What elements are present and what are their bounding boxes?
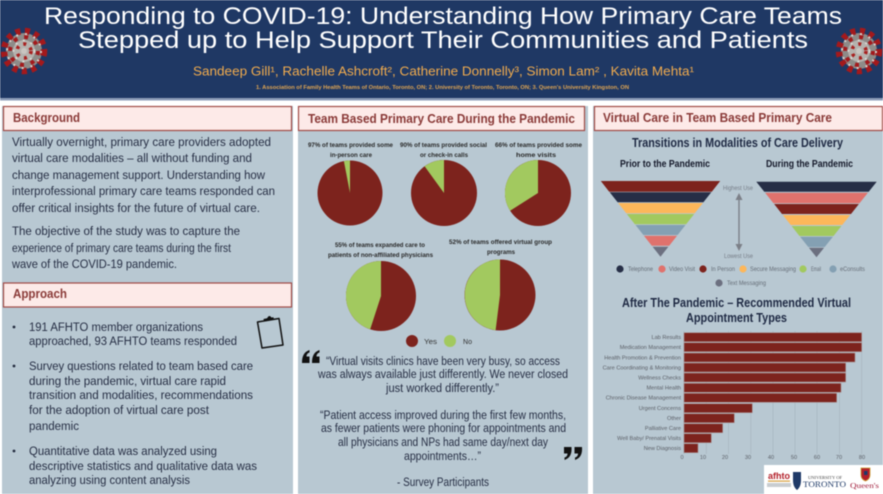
icon: opening quotation mark <box>302 350 320 363</box>
bar chart: recommended virtual appointment types: Other <box>667 416 681 422</box>
title: Responding to COVID-19: Understanding How Primary Care Teams <box>44 3 842 30</box>
text block: background: experience of primary care teams during the first <box>12 241 232 255</box>
heading: Team Based Primary Care: Team Based Primary Care During the Pandemic <box>308 111 575 126</box>
text block: quotes: just worked differently.” <box>385 381 499 395</box>
text block: approach bullets: approached, 93 AFHTO teams responded <box>29 334 237 348</box>
bar chart: recommended virtual appointment types: Mental Health <box>646 386 681 392</box>
text block: approach bullets: Quantitative data was analyzed using <box>29 444 217 458</box>
panel: right column <box>593 106 883 494</box>
legend: modalities: In Person <box>711 267 735 273</box>
bar chart: recommended virtual appointment types: 10 <box>700 455 706 461</box>
pie: non-affiliated physicians: 55% of teams expanded care to <box>335 242 425 249</box>
legend: modalities: Email <box>811 267 821 273</box>
authors: Sandeep Gill¹, Rachelle Ashcroft², Catherine Donnelly³, Simon Lam² , Kavita Mehta¹ <box>193 64 695 78</box>
text block: quotes <box>317 354 568 489</box>
text block: quotes: was always available just differently. We never closed <box>317 367 568 381</box>
bar chart: recommended virtual appointment types: 20 <box>722 455 728 461</box>
text block: background <box>11 135 275 271</box>
affiliations: 1. Association of Family Health Teams of Ontario, Toronto, ON; 2. University of Toronto, Toronto, ON; 3. Queen's University Kingston, ON <box>256 85 629 91</box>
text block: quotes: “Patient access improved during the first few months, <box>320 408 566 422</box>
pie: home visits <box>495 142 582 226</box>
bar chart: recommended virtual appointment types: 50 <box>791 455 797 461</box>
logos <box>764 465 883 494</box>
bar chart: recommended virtual appointment types: Well Baby/ Prenatal Visits <box>617 436 681 442</box>
heading: Virtual Care <box>594 106 882 130</box>
arrow: highest to lowest use: Highest Use <box>723 186 754 192</box>
panel: middle column <box>298 106 588 494</box>
pie: in-person care: in-person care <box>330 152 372 159</box>
heading: Background: Background <box>13 110 80 125</box>
bar chart: recommended virtual appointment types: Health Promotion & Prevention <box>604 355 681 361</box>
pie: home visits: 66% of teams provided some <box>495 142 582 149</box>
icon: coronavirus right <box>839 31 879 71</box>
text block: quotes: - Survey Participants <box>397 475 489 489</box>
arrow: highest to lowest use <box>723 186 754 260</box>
bar chart: recommended virtual appointment types: 60 <box>814 455 820 461</box>
text block: background: The objective of the study was to capture the <box>12 224 240 238</box>
bar chart: recommended virtual appointment types: 30 <box>745 455 751 461</box>
pie: virtual group programs: 52% of teams offered virtual group <box>449 239 552 246</box>
heading: Approach: Approach <box>13 286 67 301</box>
text block: approach bullets: descriptive statistics and qualitative data was <box>29 459 257 473</box>
legend: modalities: Video Visit <box>669 267 695 273</box>
bar chart: recommended virtual appointment types: Wellness Checks <box>638 375 681 381</box>
legend: yes / no: No <box>463 339 472 346</box>
text block: approach bullets <box>13 320 257 487</box>
logo: Queen's: Queen's <box>850 481 879 490</box>
bar chart: recommended virtual appointment types: Urgent Concerns <box>639 406 681 412</box>
text block: approach bullets: during the pandemic, virtual care rapid <box>29 374 226 388</box>
panel: left column <box>2 106 293 494</box>
legend: modalities: Telephone <box>628 267 654 273</box>
text block: approach bullets: pandemic <box>29 419 79 433</box>
bar chart: recommended virtual appointment types: 80 <box>859 455 865 461</box>
bar chart: recommended virtual appointment types: New Diagnosis <box>644 446 681 452</box>
text block: quotes: all physicians and NPs had same day/next day <box>338 435 549 449</box>
title <box>44 3 842 54</box>
bar chart: recommended virtual appointment types: Care Coordinating & Monitoring <box>603 365 681 371</box>
text block: approach bullets: analyzing using content analysis <box>29 473 190 487</box>
pie: in-person care <box>308 142 393 226</box>
text block: quotes: as fewer patients were phoning for appointments and <box>321 421 566 435</box>
heading: Transitions: Transitions in Modalities of Care Delivery <box>632 136 843 150</box>
text block: background: virtual care modalities – all without funding and <box>12 151 252 165</box>
bar chart: recommended virtual appointment types: Lab Results <box>651 335 681 341</box>
text block: background: change management support. Understanding how <box>12 168 265 182</box>
title: Stepped up to Help Support Their Communities and Patients <box>78 27 808 54</box>
heading: Virtual Care: Virtual Care in Team Based Primary Care <box>603 110 832 125</box>
text block: approach bullets: Survey questions related to team based care <box>29 359 253 373</box>
text block: approach bullets: transition and modalities, recommendations <box>29 388 253 402</box>
pie: social calls: 90% of teams provided social <box>400 142 487 149</box>
text block: quotes: “Virtual visits clinics have been very busy, so access <box>326 354 560 368</box>
header banner <box>0 0 883 100</box>
heading: After the pandemic: After The Pandemic – Recommended Virtual <box>622 296 851 310</box>
legend: yes / no: Yes <box>424 339 438 346</box>
bar chart: recommended virtual appointment types: Medication Management <box>620 345 681 351</box>
pie: home visits: home visits <box>516 152 556 159</box>
pie: virtual group programs: programs <box>487 249 515 256</box>
legend: modalities <box>616 265 865 287</box>
logo: University of Toronto <box>793 472 846 490</box>
heading: prior: Prior to the Pandemic <box>620 158 710 170</box>
text block: background: offer critical insights for the future of virtual care. <box>12 201 260 215</box>
pie: social calls: or check-in calls <box>420 152 468 159</box>
bar chart: recommended virtual appointment types: Palliative Care <box>645 426 681 432</box>
icon: clipboard <box>258 316 283 348</box>
bar chart: recommended virtual appointment types: 40 <box>768 455 774 461</box>
icon: coronavirus left <box>4 31 44 71</box>
pie: virtual group programs <box>449 239 552 330</box>
logo: University of Toronto: UNIVERSITY OF <box>808 475 843 480</box>
text block: background: wave of the COVID-19 pandemic. <box>11 257 177 271</box>
heading: After the pandemic <box>622 296 851 325</box>
legend: modalities: Secure Messaging <box>750 267 796 273</box>
funnel: prior to the pandemic <box>601 181 720 257</box>
text block: approach bullets: for the adoption of virtual care post <box>29 403 210 417</box>
heading: Approach <box>4 283 292 307</box>
legend: modalities: eConsults <box>840 267 865 273</box>
text block: quotes: appointments…” <box>404 449 481 463</box>
bar chart: recommended virtual appointment types <box>603 331 865 461</box>
pie: non-affiliated physicians: patients of non-affiliated physicians <box>328 252 433 259</box>
heading: during: During the Pandemic <box>766 158 853 170</box>
bar chart: recommended virtual appointment types: 70 <box>836 455 842 461</box>
heading: Team Based Primary Care <box>298 106 584 130</box>
bar chart: recommended virtual appointment types: Chronic Disease Management <box>606 396 681 402</box>
heading: Background <box>4 106 292 130</box>
logo: University of Toronto: TORONTO <box>803 479 846 489</box>
heading: After the pandemic: Appointment Types <box>686 311 787 325</box>
pie: social calls <box>400 142 487 226</box>
icon: closing quotation mark <box>564 447 582 460</box>
text block: background: interprofessional primary care teams responded can <box>12 184 275 198</box>
legend: yes / no <box>406 335 472 347</box>
logo: afhto: afhto <box>768 471 790 481</box>
pie: non-affiliated physicians <box>328 242 433 331</box>
legend: modalities: Text Messaging <box>727 281 766 287</box>
text block: approach bullets: 191 AFHTO member organizations <box>29 320 203 334</box>
funnel: during the pandemic <box>756 182 877 257</box>
text block: background: Virtually overnight, primary care providers adopted <box>12 135 271 149</box>
pie: in-person care: 97% of teams provided some <box>308 142 393 149</box>
bar chart: recommended virtual appointment types: 0 <box>680 455 684 461</box>
arrow: highest to lowest use: Lowest Use <box>724 254 754 260</box>
